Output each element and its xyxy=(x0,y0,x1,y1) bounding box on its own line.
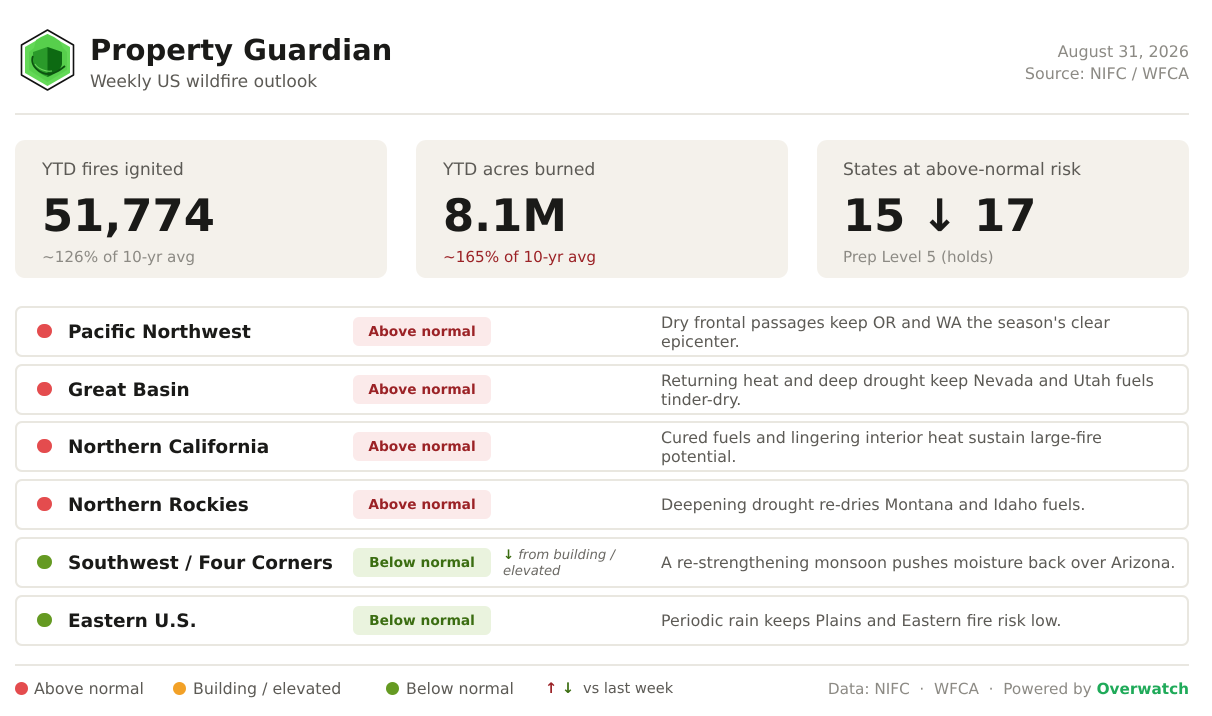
row: Eastern U.S.: Periodic rain keeps Plains and Eastern fire risk low. xyxy=(661,611,1061,630)
row: Great Basin: tinder-dry. xyxy=(661,390,741,408)
row: Southwest / Four Corners: Southwest / Four Corners xyxy=(68,552,333,574)
row: Northern Rockies: Northern Rockies xyxy=(68,494,249,516)
row: Northern Rockies: Deepening drought re-dries Montana and Idaho fuels. xyxy=(661,495,1085,514)
legend: below normal: Below normal xyxy=(406,679,514,698)
row: Pacific Northwest: Pacific Northwest xyxy=(68,322,251,342)
legend: arrows vs last week: ↑ ↓ xyxy=(545,680,574,697)
panel: YTD fires ignited xyxy=(15,140,387,278)
row: Northern California: Northern California xyxy=(68,436,269,458)
legend: arrows vs last week: vs last week xyxy=(583,680,673,697)
subtitle: Weekly US wildfire outlook xyxy=(90,72,317,92)
row: Pacific Northwest xyxy=(15,306,1189,357)
row: Great Basin: Above normal xyxy=(368,382,476,398)
date and source: Source: NIFC / WFCA xyxy=(1025,64,1189,83)
row: Pacific Northwest: Dry frontal passages keep OR and WA the season's clear xyxy=(661,312,1110,332)
panel: states at above-normal risk xyxy=(817,140,1189,278)
legend: building / elevated: Building / elevated xyxy=(193,679,341,698)
row: Pacific Northwest: Above normal xyxy=(368,324,476,340)
panel: states at above-normal risk: Prep Level 5 (holds) xyxy=(843,248,994,266)
row: Southwest / Four Corners: elevated xyxy=(503,564,560,579)
row: Eastern U.S.: Eastern U.S. xyxy=(68,610,197,632)
row: Great Basin xyxy=(15,364,1189,415)
panel: YTD fires ignited: ~126% of 10-yr avg xyxy=(42,248,195,266)
row: Great Basin: Great Basin xyxy=(68,380,190,400)
row: Southwest / Four Corners xyxy=(15,537,1189,588)
panel: states at above-normal risk: States at above-normal risk xyxy=(843,160,1081,180)
row: Northern California: Above normal xyxy=(368,438,476,454)
row: Northern California xyxy=(15,421,1189,472)
date and source xyxy=(1025,42,1189,83)
row: Great Basin: Returning heat and deep drought keep Nevada and Utah fuels xyxy=(661,370,1154,390)
legend: above normal: Above normal xyxy=(34,679,144,698)
row: Northern California: Cured fuels and lingering interior heat sustain large-fire xyxy=(661,428,1102,446)
row: Northern Rockies: Above normal xyxy=(368,496,476,512)
date and source: August 31, 2026 xyxy=(1058,42,1189,61)
header logo icon xyxy=(20,29,74,91)
row: Northern Rockies xyxy=(15,479,1189,530)
panel: YTD acres burned: ~165% of 10-yr avg xyxy=(443,248,596,266)
row: Northern California: potential. xyxy=(661,446,736,466)
panel: states at above-normal risk: 15 ↓ 17 xyxy=(843,189,1036,242)
title: Property Guardian xyxy=(90,33,392,67)
row: Southwest / Four Corners: Below normal xyxy=(369,554,475,570)
row: Southwest / Four Corners: ↓ from building / xyxy=(503,548,615,563)
panel: YTD fires ignited: YTD fires ignited xyxy=(42,160,184,180)
footer credits: Data: NIFC · WFCA · Powered by Overwatch xyxy=(828,680,1189,698)
row: Eastern U.S.: Below normal xyxy=(369,612,475,628)
panel: YTD acres burned: 8.1M xyxy=(443,189,567,242)
panel: YTD fires ignited: 51,774 xyxy=(42,189,215,242)
panel: YTD acres burned xyxy=(416,140,788,278)
row: Southwest / Four Corners: A re-strengthening monsoon pushes moisture back over Arizona. xyxy=(661,553,1175,572)
panel: YTD acres burned: YTD acres burned xyxy=(443,160,595,180)
row: Eastern U.S. xyxy=(15,595,1189,646)
row: Pacific Northwest: epicenter. xyxy=(661,332,740,350)
